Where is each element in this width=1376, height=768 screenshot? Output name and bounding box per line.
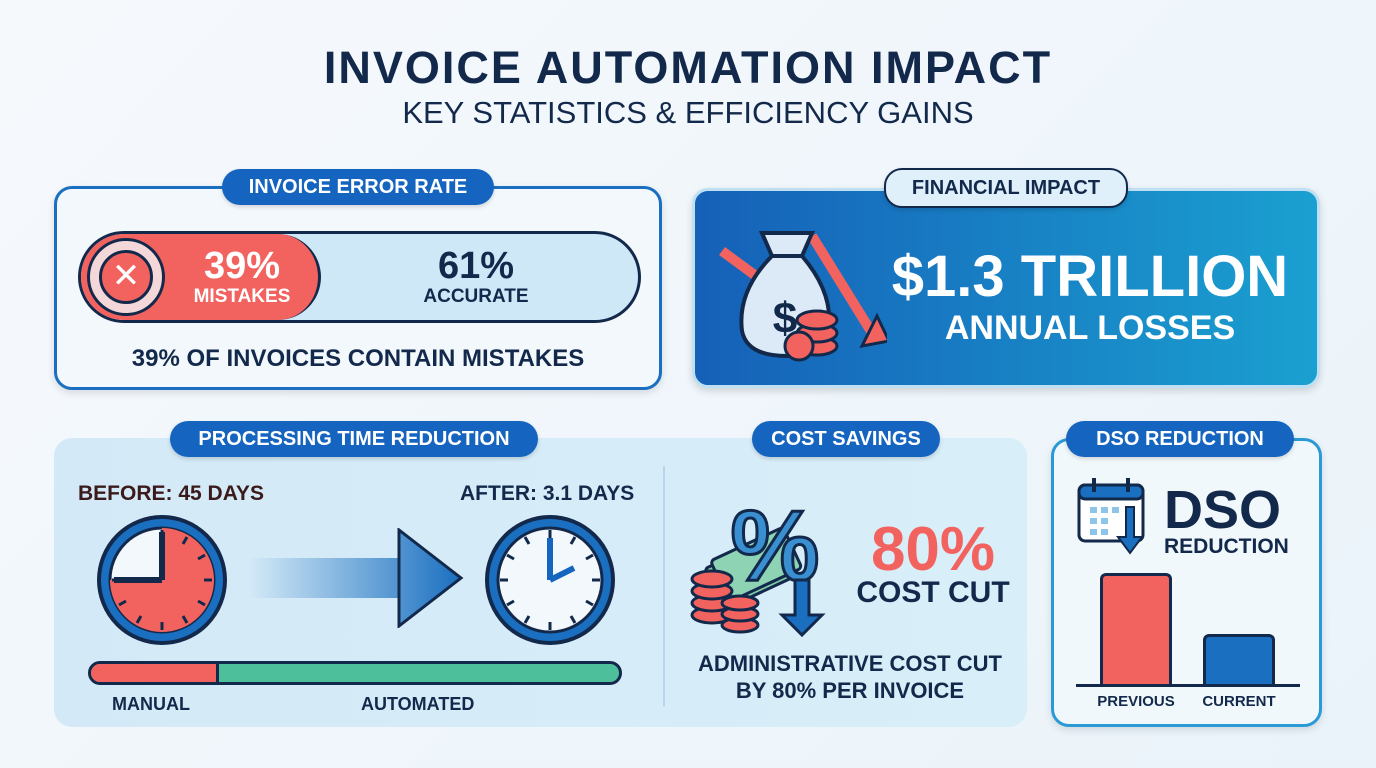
panel: invoice error rate (54, 186, 662, 390)
panel: financial impact (692, 188, 1320, 388)
title: INVOICE AUTOMATION IMPACT (324, 42, 1052, 93)
cost cut: COST CUT (856, 576, 1010, 609)
label manual: MANUAL (112, 694, 190, 714)
icon: money percent (690, 490, 826, 637)
icon: money bag (719, 231, 887, 362)
icon: x circle: ✕ (112, 257, 140, 295)
amount: $1.3 TRILLION (892, 244, 1288, 309)
arrow (258, 528, 464, 628)
DSO heading: DSO (1164, 480, 1281, 540)
pill: cost savings (752, 421, 940, 457)
pill: processing time (170, 421, 538, 457)
pill: invoice error rate (222, 169, 494, 205)
pill: financial impact (884, 168, 1128, 208)
caption: BY 80% PER INVOICE (736, 678, 964, 703)
61% text (423, 245, 529, 307)
label automated: AUTOMATED (361, 694, 474, 714)
icon: x circle (87, 238, 165, 316)
icon: calendar (1078, 478, 1144, 554)
icon: clock before (97, 515, 227, 645)
pill: financial impact: FINANCIAL IMPACT (912, 177, 1100, 199)
pill: cost savings: COST SAVINGS (771, 428, 921, 450)
error bar (78, 231, 641, 323)
39% text: MISTAKES (194, 286, 290, 307)
subtitle: KEY STATISTICS & EFFICIENCY GAINS (402, 95, 974, 130)
panel: DSO reduction (1051, 438, 1322, 727)
bar chart: CURRENT (1202, 693, 1276, 710)
after label: AFTER: 3.1 DAYS (460, 482, 634, 505)
39% text: 39% (204, 245, 280, 287)
caption: ADMINISTRATIVE COST CUT (698, 651, 1002, 676)
bar chart (1076, 573, 1300, 710)
panel: processing + cost savings (54, 438, 1027, 727)
icon: clock after (485, 515, 615, 645)
progress bar (88, 661, 622, 685)
icon: money percent: % (731, 490, 819, 602)
39% text (194, 245, 290, 307)
80%: 80% (871, 515, 995, 584)
pill: DSO reduction: DSO REDUCTION (1096, 428, 1264, 450)
bar chart: PREVIOUS (1097, 693, 1175, 710)
caption (698, 651, 1002, 703)
61% text: ACCURATE (423, 286, 529, 307)
sublabel: ANNUAL LOSSES (945, 309, 1235, 347)
pill: DSO reduction (1066, 421, 1294, 457)
before label: BEFORE: 45 DAYS (78, 482, 264, 505)
pill: invoice error rate: INVOICE ERROR RATE (249, 176, 467, 198)
61% text: 61% (438, 245, 514, 287)
pill: processing time: PROCESSING TIME REDUCTION (198, 428, 510, 450)
caption: 39% OF INVOICES CONTAIN MISTAKES (132, 345, 584, 372)
icon: money bag: $ (773, 294, 797, 343)
reduction label: REDUCTION (1164, 535, 1289, 558)
mistakes segment (81, 234, 321, 320)
